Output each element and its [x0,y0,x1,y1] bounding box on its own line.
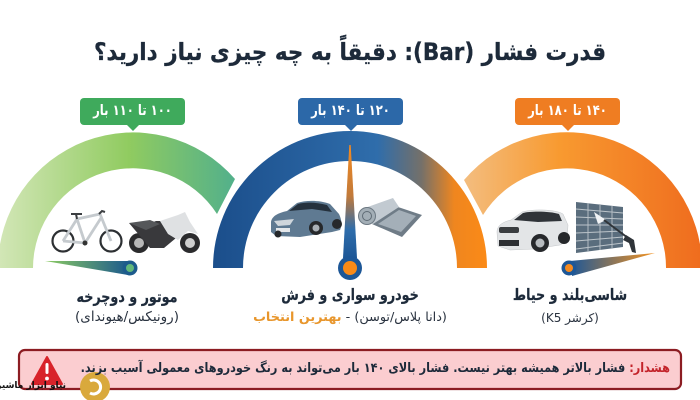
gauge arc: orange [464,132,700,268]
watermark logo [80,372,110,400]
label: motorcycle heading: موتور و دوچرخه [76,288,178,306]
icon: rolled carpet [358,198,422,237]
tag: green gauge [80,98,185,125]
title: قدرت فشار (Bar): دقیقاً به چه چیزی نیاز دارید؟ [94,38,606,66]
tag: orange gauge: ۱۴۰ تا ۱۸۰ بار [528,103,607,119]
gauge arc: green [0,132,235,268]
icon: warning triangle [32,357,62,384]
needle: orange gauge [562,253,655,276]
icon: pressure washer [594,212,636,253]
label: motorcycle sub: (رونیکس/هیوندای) [75,309,179,325]
icon: SUV [497,210,570,252]
tag: green gauge: ۱۰۰ تا ۱۱۰ بار [93,103,172,119]
warning text: هشدار: فشار بالاتر همیشه بهتر نیست. فشار بالای ۱۴۰ بار می‌تواند به رنگ خودروهای معمولی آسیب بزند. [81,361,670,376]
label: SUV sub: (کرشر K5) [541,311,599,325]
tag: orange gauge [515,98,620,125]
tag: blue gauge [298,98,403,125]
icon: brick wall [576,202,623,253]
icon: bicycle [52,211,122,252]
label: car sub: (دانا پلاس/توسن) - بهترین انتخاب [253,310,447,325]
icon: motorcycle [129,212,200,253]
gauge arc: blue [213,131,487,268]
tag: blue gauge: ۱۲۰ تا ۱۴۰ بار [311,103,390,119]
needle: blue gauge [338,145,362,280]
icon: sedan car [271,201,342,238]
label: SUV heading: شاسی‌بلند و حیاط [513,286,627,304]
warning banner [19,350,681,389]
label: car heading: خودرو سواری و فرش [281,286,419,304]
needle: green gauge [45,260,138,276]
